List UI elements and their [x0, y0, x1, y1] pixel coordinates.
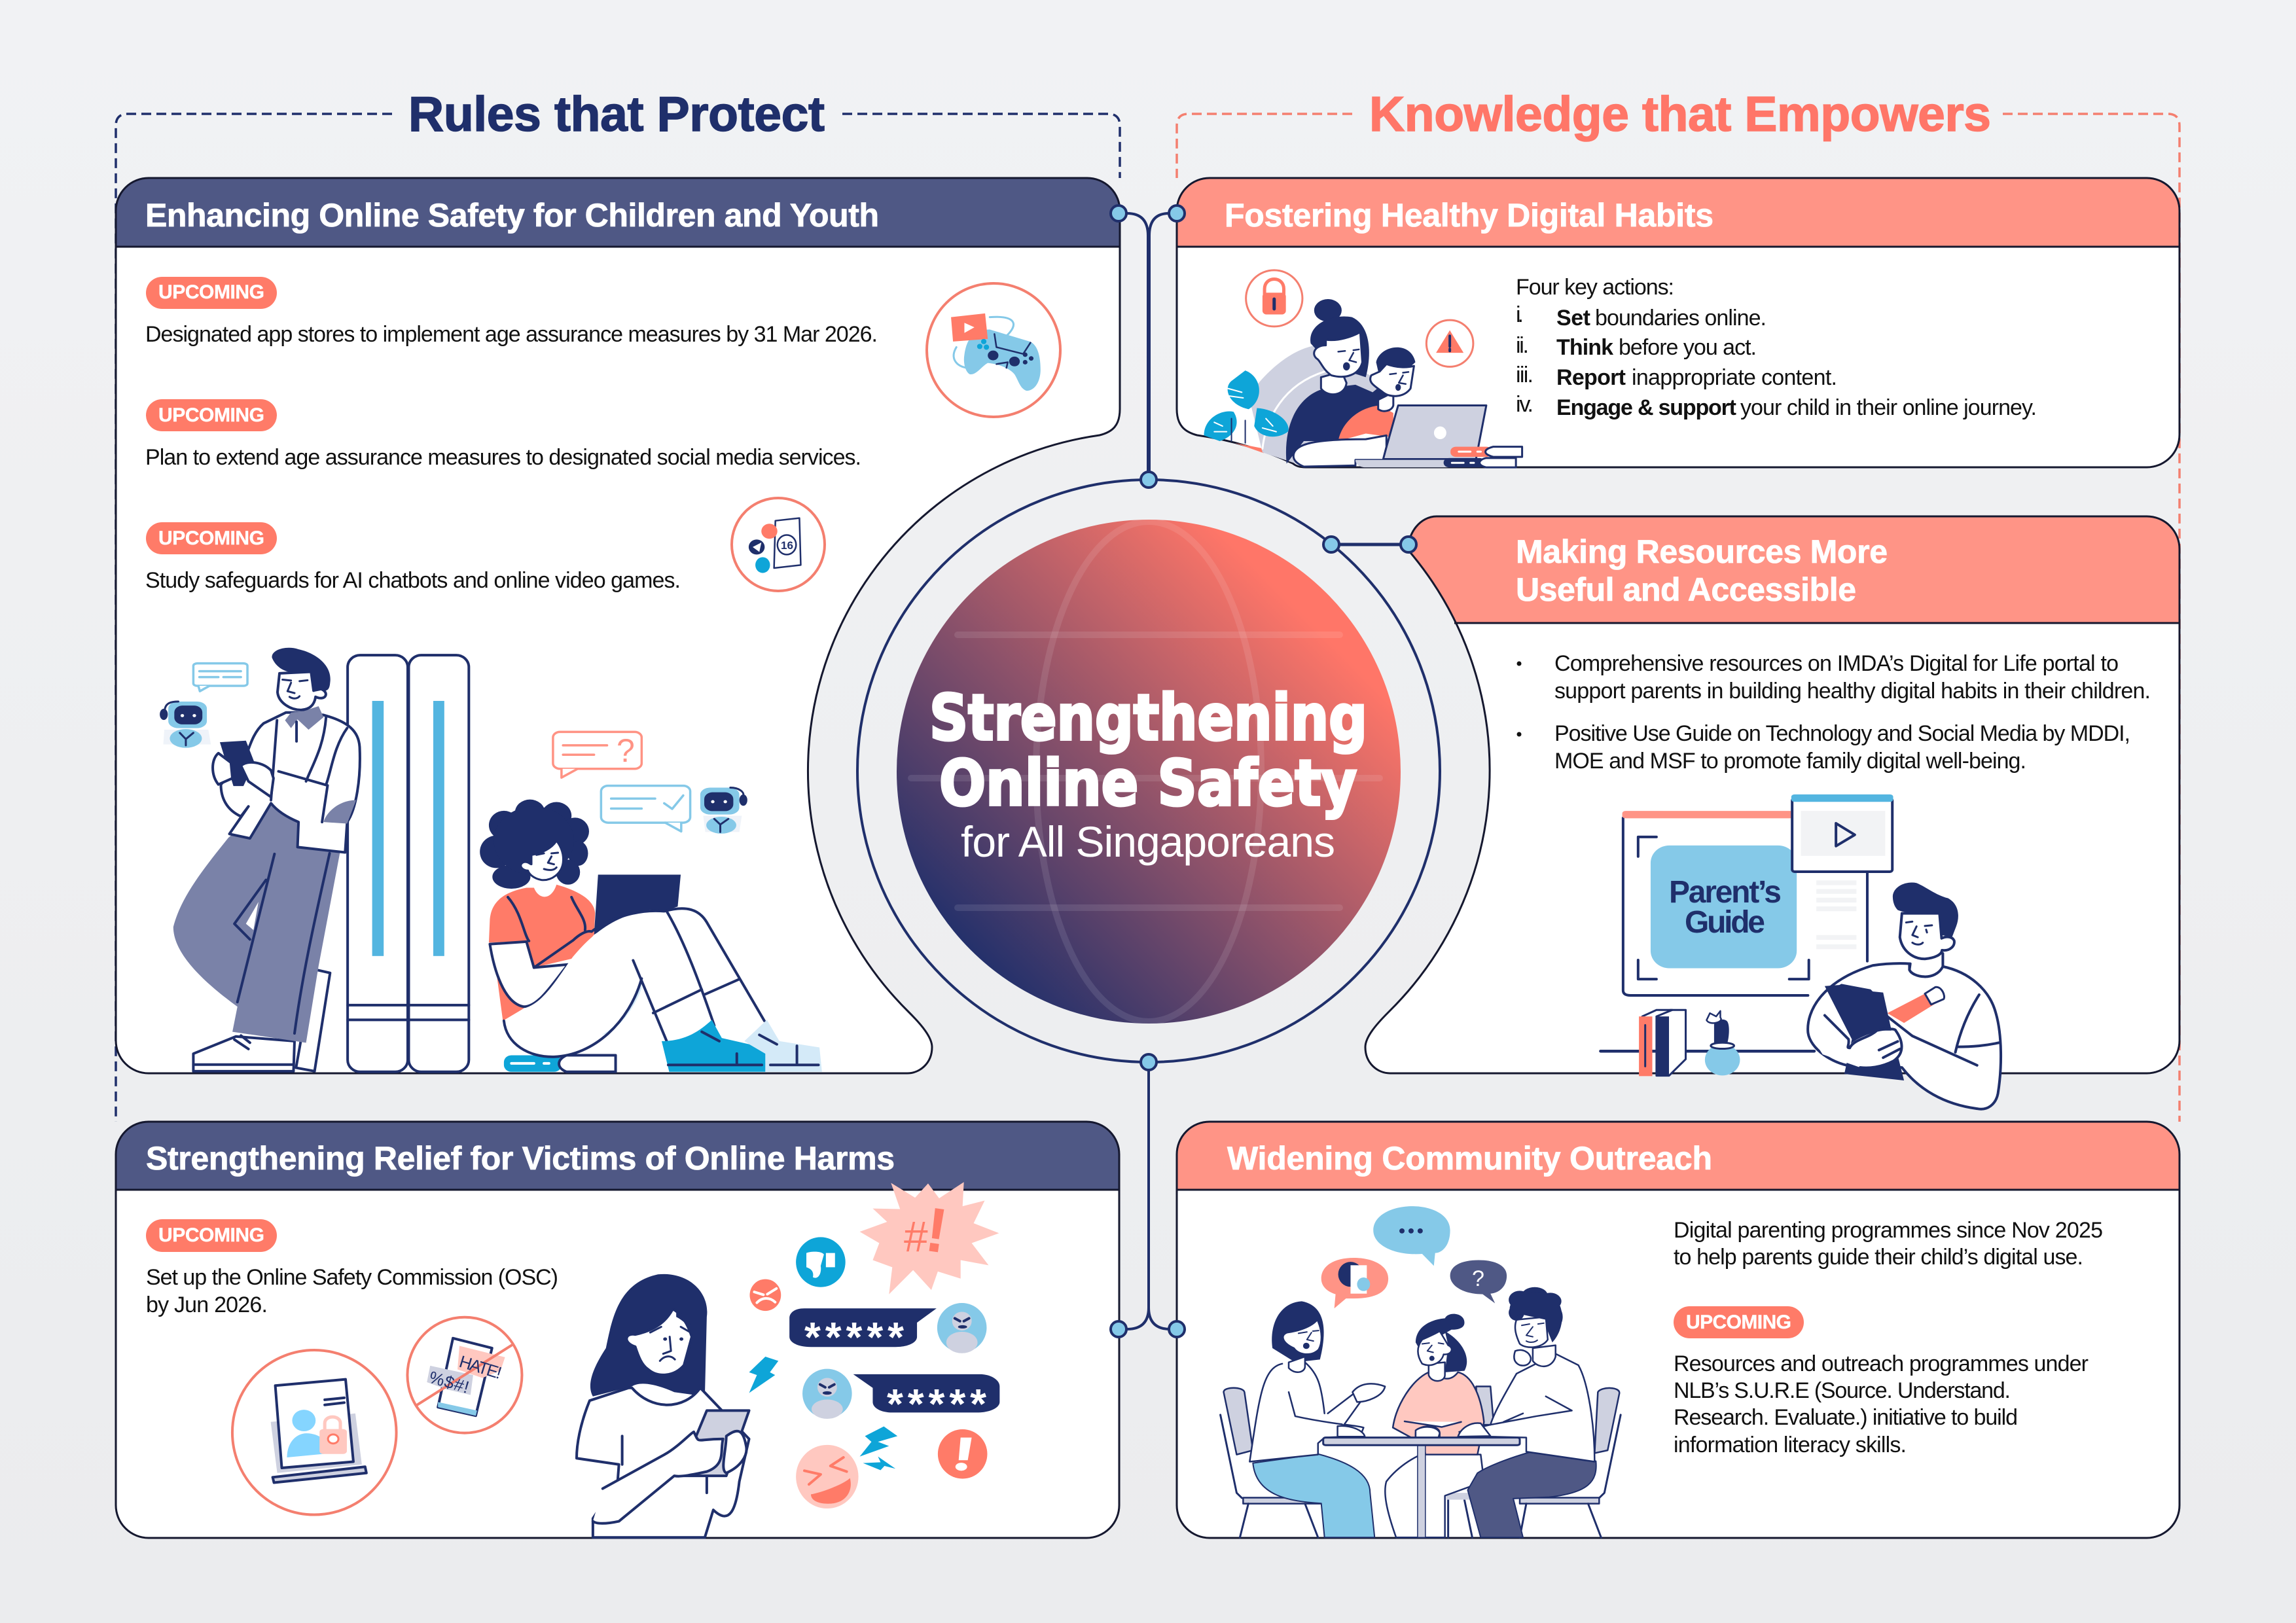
- four key actions list: Four key actions:: [1516, 275, 1674, 300]
- icons: online harm symbols: *****: [804, 1313, 904, 1361]
- upcoming item 2: Plan to extend age assurance measures to designated social media services.: [145, 445, 861, 470]
- icon: laptop with protected user: [232, 1350, 397, 1515]
- panel: Widening Community Outreach: [1177, 1122, 2179, 1538]
- panel heading: Fostering Healthy Digital Habits: [1225, 197, 1713, 234]
- illustration: Parent's Guide page, video window and man with clipboard: Parent’s: [1669, 875, 1782, 910]
- illustration: distressed woman with phone: [577, 1274, 749, 1537]
- four key actions list: iv.: [1516, 392, 1534, 417]
- four key actions list: [1516, 275, 2037, 420]
- upcoming item 2: [145, 399, 861, 470]
- ring and connector nodes: [857, 205, 1440, 1337]
- illustration: Parent's Guide page, video window and man with clipboard: [1600, 794, 2001, 1109]
- programme text: [1674, 1218, 2103, 1270]
- illustration: man with phone leaning on books: [173, 648, 469, 1072]
- upcoming item: UPCOMING: [1686, 1311, 1791, 1333]
- bullet text: [1517, 651, 2151, 774]
- four key actions list: Report: [1556, 365, 1626, 390]
- icons: online harm symbols: [749, 1182, 999, 1508]
- upcoming item: [1674, 1306, 2089, 1457]
- upcoming item 1: [145, 277, 878, 347]
- upcoming item 3: Study safeguards for AI chatbots and online video games.: [145, 568, 681, 593]
- icon: social and age rating: [732, 498, 825, 591]
- upcoming item: [146, 1219, 558, 1317]
- books: [348, 655, 469, 1072]
- illustration: family at a table with speech bubbles: ?: [1472, 1266, 1484, 1291]
- upcoming item: Research. Evaluate.) initiative to build: [1674, 1405, 2018, 1430]
- upcoming item 3: UPCOMING: [158, 527, 264, 549]
- icons: online harm symbols: *****: [887, 1380, 986, 1427]
- icon: social and age rating: 16: [781, 539, 793, 552]
- four key actions list: before you act.: [1619, 335, 1757, 360]
- heading: Knowledge that Empowers with dashed bracket: [1177, 86, 2179, 1122]
- upcoming item: Resources and outreach programmes under: [1674, 1351, 2089, 1376]
- upcoming item 1: UPCOMING: [158, 281, 264, 303]
- panel heading: Widening Community Outreach: [1227, 1140, 1712, 1177]
- four key actions list: inappropriate content.: [1632, 365, 1837, 390]
- four key actions list: Engage & support: [1556, 395, 1736, 420]
- four key actions list: Think: [1556, 335, 1613, 360]
- panel: Enhancing Online Safety for Children and Youth: ?: [617, 732, 635, 769]
- illustration: woman with laptop and bubbles: [480, 732, 822, 1072]
- heading: Knowledge that Empowers with dashed bracket: Knowledge that Empowers: [1369, 86, 1991, 141]
- middle child legs: [1385, 1453, 1484, 1537]
- heading: Rules that Protect with dashed bracket: [116, 86, 1120, 1122]
- bullet text: Positive Use Guide on Technology and Social Media by MDDI,: [1554, 721, 2130, 746]
- panel heading: Strengthening Relief for Victims of Online Harms: [146, 1140, 895, 1177]
- icons: online harm symbols: !: [922, 1194, 952, 1267]
- panel heading: Making Resources More: [1516, 533, 1888, 570]
- upcoming item: by Jun 2026.: [146, 1293, 268, 1317]
- icons: online harm symbols: #: [904, 1212, 928, 1260]
- programme text: Digital parenting programmes since Nov 2025: [1674, 1218, 2103, 1243]
- heading: Rules that Protect with dashed bracket: Rules that Protect: [408, 86, 825, 141]
- bullet text: MOE and MSF to promote family digital well-being.: [1554, 749, 2026, 774]
- upcoming item: Set up the Online Safety Commission (OSC): [146, 1265, 558, 1290]
- main title: for All Singaporeans: [961, 817, 1335, 866]
- four key actions list: your child in their online journey.: [1740, 395, 2037, 420]
- bullet text: support parents in building healthy digital habits in their children.: [1554, 679, 2151, 704]
- main title: Online Safety: [939, 747, 1357, 820]
- globe: [897, 520, 1401, 1024]
- programme text: to help parents guide their child’s digital use.: [1674, 1245, 2083, 1270]
- four key actions list: boundaries online.: [1595, 306, 1767, 330]
- icon: warning triangle: [1426, 320, 1473, 366]
- icon: game controller: [927, 283, 1060, 417]
- icon: padlock: [1246, 270, 1302, 327]
- upcoming item: NLB’s S.U.R.E (Source. Understand.: [1674, 1378, 2011, 1403]
- panel: Fostering Healthy Digital Habits: [1172, 173, 2186, 467]
- upcoming item 1: Designated app stores to implement age assurance measures by 31 Mar 2026.: [145, 322, 878, 347]
- panel heading: Enhancing Online Safety for Children and Youth: [145, 197, 879, 234]
- icon: hate speech blocked on phone: %$#!: [427, 1367, 471, 1397]
- bullet text: Comprehensive resources on IMDA’s Digital for Life portal to: [1554, 651, 2119, 676]
- upcoming item: information literacy skills.: [1674, 1433, 1907, 1457]
- main title: Strengthening: [929, 681, 1367, 755]
- main title: [929, 681, 1367, 866]
- panel: Strengthening Relief for Victims of Online Harms: [116, 1122, 1119, 1538]
- panel heading: [1516, 533, 1888, 608]
- four key actions list: ii.: [1516, 333, 1529, 358]
- four key actions list: iii.: [1516, 363, 1534, 387]
- icon: hate speech blocked on phone: HATE!: [457, 1351, 504, 1383]
- panel heading: Useful and Accessible: [1516, 571, 1856, 608]
- four key actions list: Set: [1556, 306, 1590, 330]
- panel: Making Resources More Useful and Accessible: [1365, 510, 2186, 1109]
- central globe with title: [857, 205, 1440, 1337]
- illustration: Parent's Guide page, video window and man with clipboard: Guide: [1685, 905, 1765, 940]
- upcoming item: UPCOMING: [158, 1224, 264, 1246]
- panel: Enhancing Online Safety for Children and Youth: [111, 173, 1126, 1073]
- upcoming item 3: [145, 522, 681, 593]
- upcoming item 2: UPCOMING: [158, 404, 264, 426]
- illustration: mother and child with laptop: [1204, 299, 1522, 467]
- four key actions list: i.: [1516, 302, 1524, 327]
- icon: hate speech blocked on phone: [407, 1317, 522, 1433]
- right adult: [1467, 1452, 1596, 1537]
- illustration: family at a table with speech bubbles: [1221, 1206, 1621, 1537]
- speech bubbles: [1373, 1206, 1450, 1266]
- left adult: [1253, 1454, 1374, 1537]
- illustration: chatbot with speech bubble (man): [160, 664, 247, 748]
